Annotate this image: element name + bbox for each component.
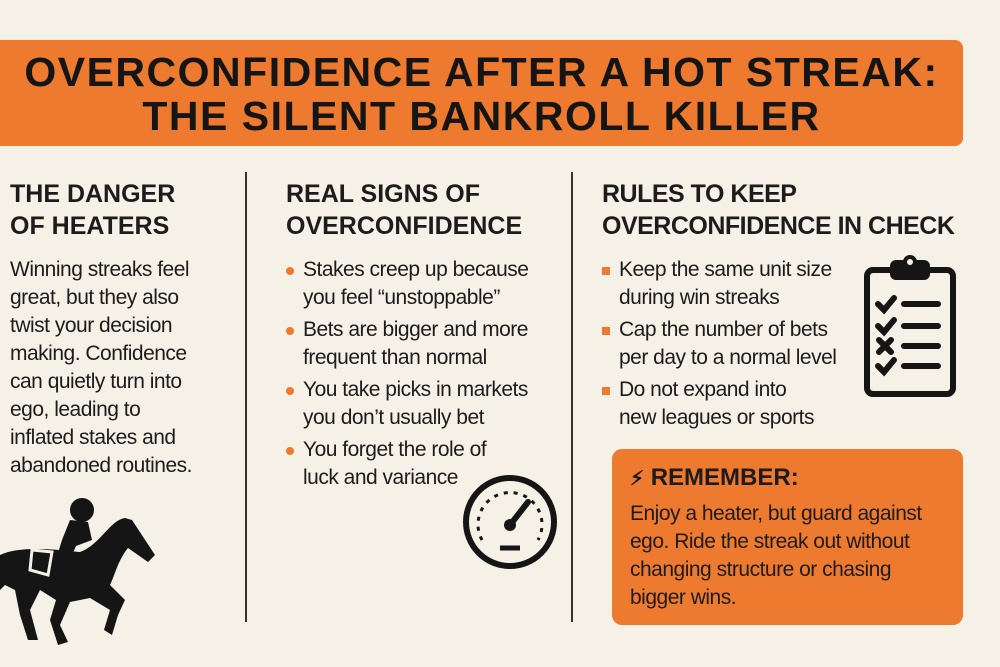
heading: the danger of heaters — [10, 180, 175, 240]
heading: the danger of heaters: THE DANGER — [10, 180, 175, 208]
text: heaters body: Winning streaks feel — [10, 258, 189, 281]
text: remember body: bigger wins. — [630, 586, 736, 609]
heading: real signs — [286, 180, 522, 240]
list: rules: per day to a normal level — [619, 346, 836, 369]
list: signs: You take picks in markets — [303, 378, 528, 401]
heading: remember: ⚡︎ REMEMBER: — [630, 464, 799, 491]
heading: rules: RULES TO KEEP — [602, 180, 796, 208]
heading: rules — [602, 180, 955, 240]
icon: horse and jockey — [0, 498, 155, 645]
list: signs: luck and variance — [303, 466, 458, 489]
title banner: OVERCONFIDENCE AFTER A HOT STREAK: — [24, 49, 939, 95]
text: remember body: Enjoy a heater, but guard against — [630, 502, 922, 525]
text: heaters body: inflated stakes and — [10, 426, 176, 449]
text: heaters body: abandoned routines. — [10, 454, 192, 477]
text: remember body — [630, 502, 922, 609]
text: heaters body — [10, 258, 192, 477]
list: rules: Do not expand into — [619, 378, 786, 401]
list: rules: Cap the number of bets — [619, 318, 827, 341]
list: rules: Keep the same unit size — [619, 258, 832, 281]
title banner: THE SILENT BANKROLL KILLER — [142, 93, 821, 139]
text: heaters body: great, but they also — [10, 286, 179, 309]
text: remember body: ego. Ride the streak out without — [630, 530, 909, 553]
list: signs — [286, 258, 528, 489]
panel: real signs of overconfidence — [286, 180, 528, 489]
icon: clipboard checklist — [864, 255, 956, 397]
heading: the danger of heaters: OF HEATERS — [10, 212, 169, 240]
text: heaters body: making. Confidence — [10, 342, 187, 365]
text: heaters body: can quietly turn into — [10, 370, 182, 393]
list: rules — [602, 258, 836, 429]
heading: rules: OVERCONFIDENCE IN CHECK — [602, 212, 954, 240]
text: heaters body: ego, leading to — [10, 398, 140, 421]
icon: speedometer — [463, 475, 557, 569]
list: signs: Stakes creep up because — [303, 258, 528, 281]
list: signs: You forget the role of — [303, 438, 486, 461]
callout: remember — [612, 449, 963, 625]
list: signs: frequent than normal — [303, 346, 487, 369]
list: signs: you don’t usually bet — [303, 406, 484, 429]
list: rules: during win streaks — [619, 286, 779, 309]
heading: real signs: OVERCONFIDENCE — [286, 212, 522, 240]
list: signs: you feel “unstoppable” — [303, 286, 500, 309]
list: signs: Bets are bigger and more — [303, 318, 528, 341]
heading: real signs: REAL SIGNS OF — [286, 180, 480, 208]
panel: danger of heaters — [10, 180, 192, 477]
text: heaters body: twist your decision — [10, 314, 172, 337]
panel: rules — [602, 180, 955, 429]
list: rules: new leagues or sports — [619, 406, 814, 429]
title banner — [0, 40, 963, 146]
text: remember body: changing structure or chasing — [630, 558, 891, 581]
